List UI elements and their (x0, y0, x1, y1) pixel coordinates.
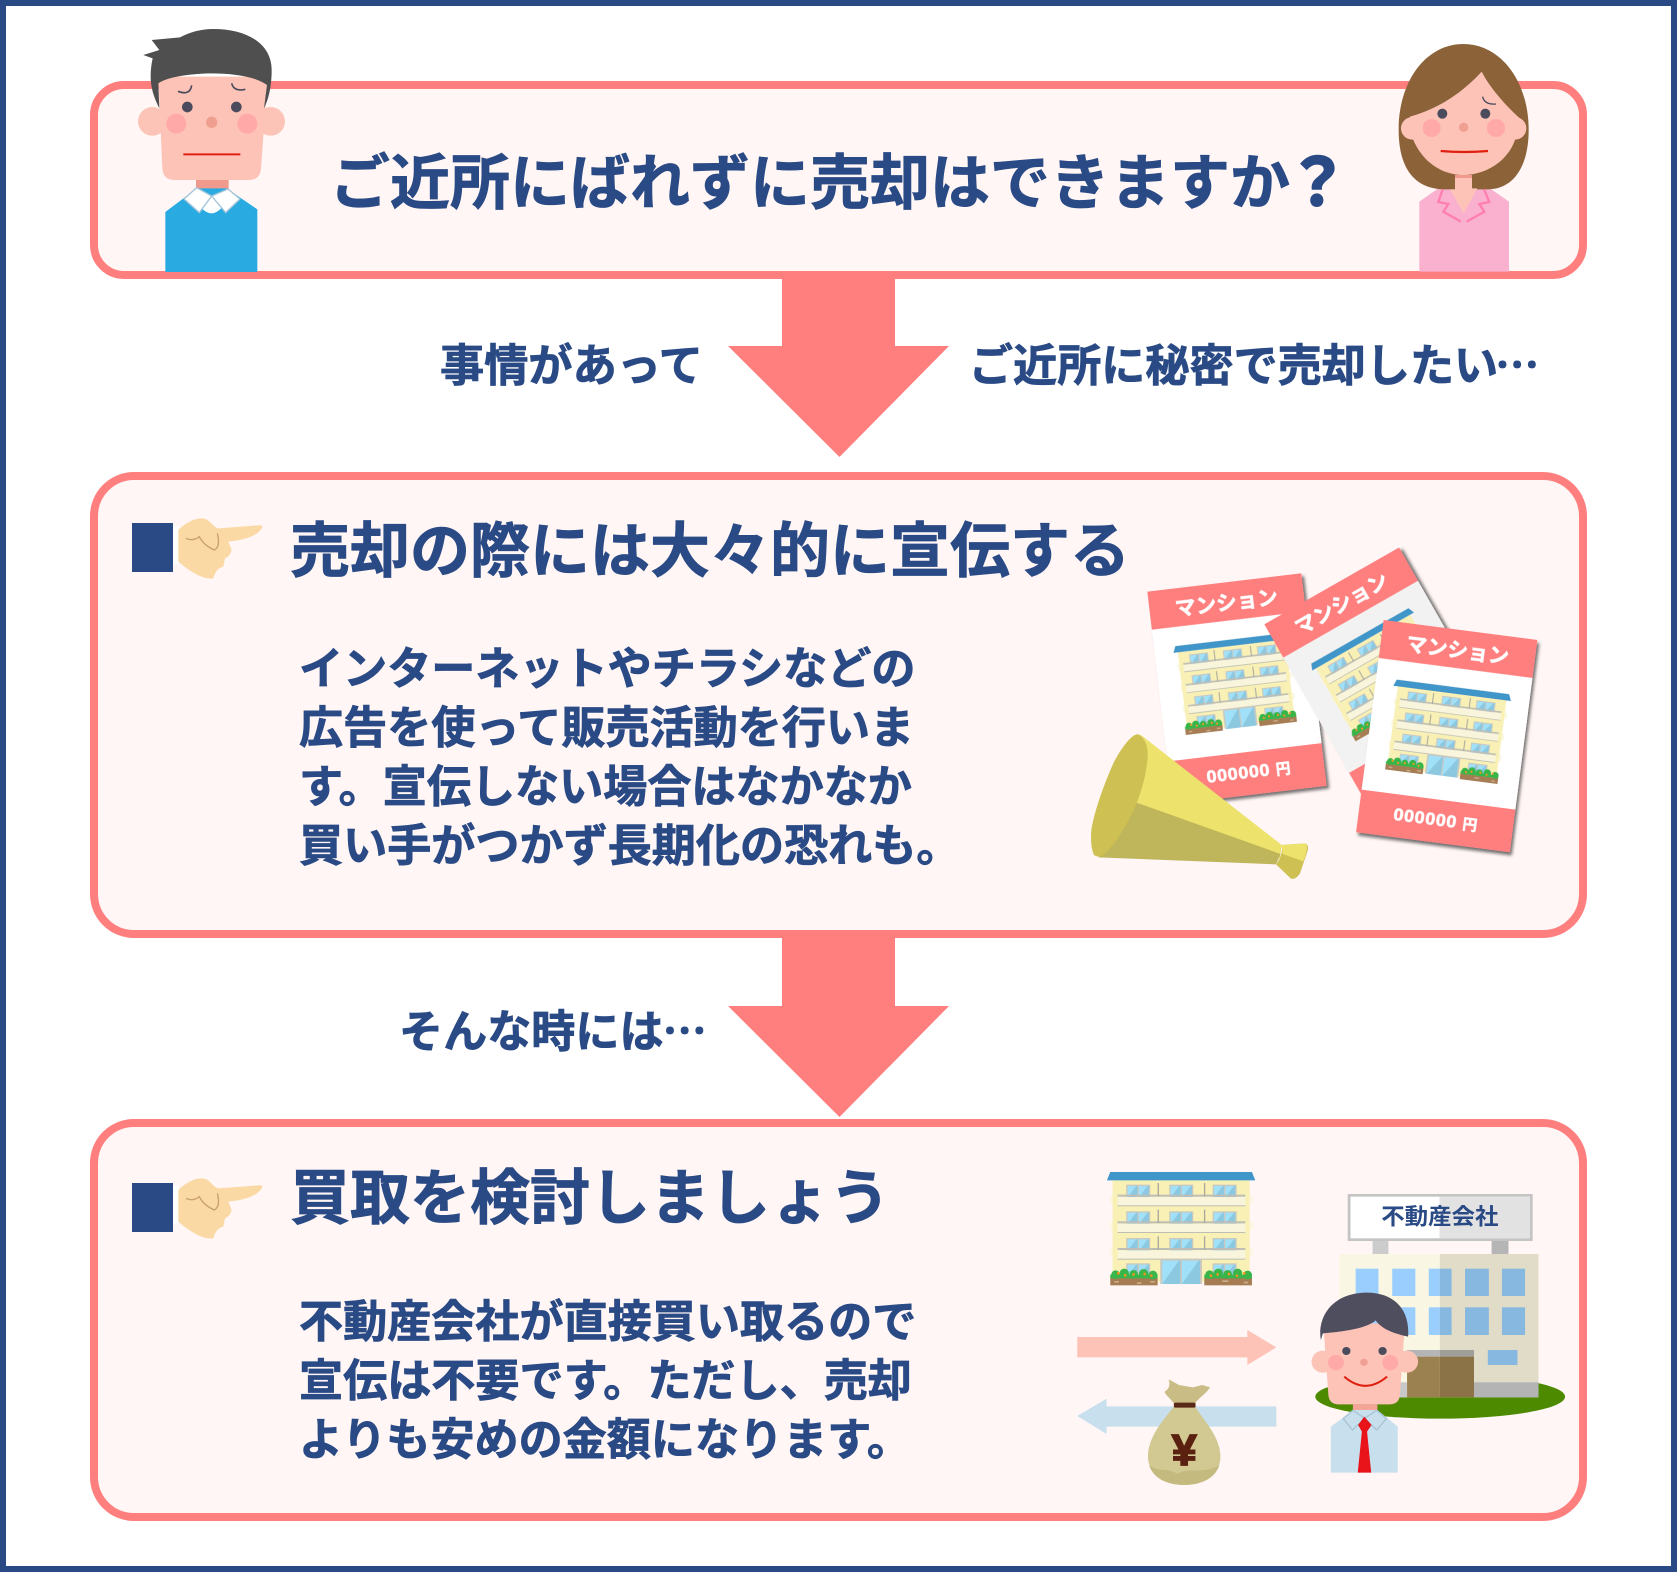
text block: advertising: す。宣伝しない場合はなかなか (299, 763, 912, 812)
money bag (1148, 1379, 1220, 1485)
text block: buyout: 不動産会社が直接買い取るので (299, 1298, 916, 1347)
ground (1315, 1375, 1565, 1419)
title: ご近所にばれずに売却はできますか (330, 150, 1290, 217)
money bag: ¥ (1172, 1427, 1197, 1475)
panel: buyout (94, 1123, 1583, 1517)
sign (1349, 1195, 1531, 1255)
text block: advertising: 買い手がつかず長期化の恐れも。 (299, 822, 960, 871)
illustration: flyers and megaphone (1091, 548, 1537, 879)
sign: 不動産会社 (1381, 1204, 1498, 1230)
icon: square bullet buyout (132, 1183, 173, 1232)
label: want secrecy: ご近所に秘密で売却したい… (969, 330, 1539, 394)
real estate office (1339, 1254, 1539, 1397)
arrow: money to seller (1077, 1399, 1276, 1434)
text block: buyout: よりも安めの金額になります。 (299, 1416, 911, 1465)
flyer: front: マンション (1405, 633, 1510, 669)
arrow: question to advertising (728, 275, 949, 457)
label: at such times: そんな時には… (399, 996, 707, 1060)
icon: worried woman (1399, 44, 1529, 272)
text block: buyout (299, 1298, 916, 1465)
apartment building (1107, 1172, 1255, 1285)
flyer: left: マンション (1174, 586, 1279, 621)
label: circumstances: 事情があって (440, 342, 703, 391)
icon: pointing hand advertising (173, 518, 262, 579)
smiling agent (1312, 1293, 1418, 1473)
flyer: left: 000000 円 (1205, 757, 1292, 787)
arrow: property to company (1077, 1330, 1276, 1365)
illustration: buyout transaction (1077, 1172, 1565, 1485)
icon: worried man (138, 29, 285, 272)
flyer: middle (1264, 548, 1505, 810)
text block: advertising: インターネットやチラシなどの (299, 645, 915, 694)
arrow: advertising to buyout (728, 934, 949, 1117)
panel: question (94, 85, 1583, 275)
heading: buyout: 買取を検討しましょう (290, 1165, 890, 1232)
flyer: front (1356, 620, 1537, 852)
title: ？ (1286, 146, 1349, 219)
flyer: middle: マンション (1291, 569, 1392, 640)
flyer: front: 000000 円 (1392, 804, 1479, 835)
megaphone (1091, 734, 1308, 879)
icon: pointing hand buyout (173, 1178, 262, 1239)
text block: buyout: 宣伝は不要です。ただし、売却 (299, 1357, 912, 1406)
icon: square bullet advertising (132, 523, 173, 572)
flyer: left (1147, 573, 1327, 804)
heading: advertising: 売却の際には大々的に宣伝する (290, 518, 1130, 585)
text block: advertising: 広告を使って販売活動を行いま (299, 704, 914, 753)
panel: advertising (94, 476, 1583, 934)
text block: advertising (299, 645, 960, 871)
